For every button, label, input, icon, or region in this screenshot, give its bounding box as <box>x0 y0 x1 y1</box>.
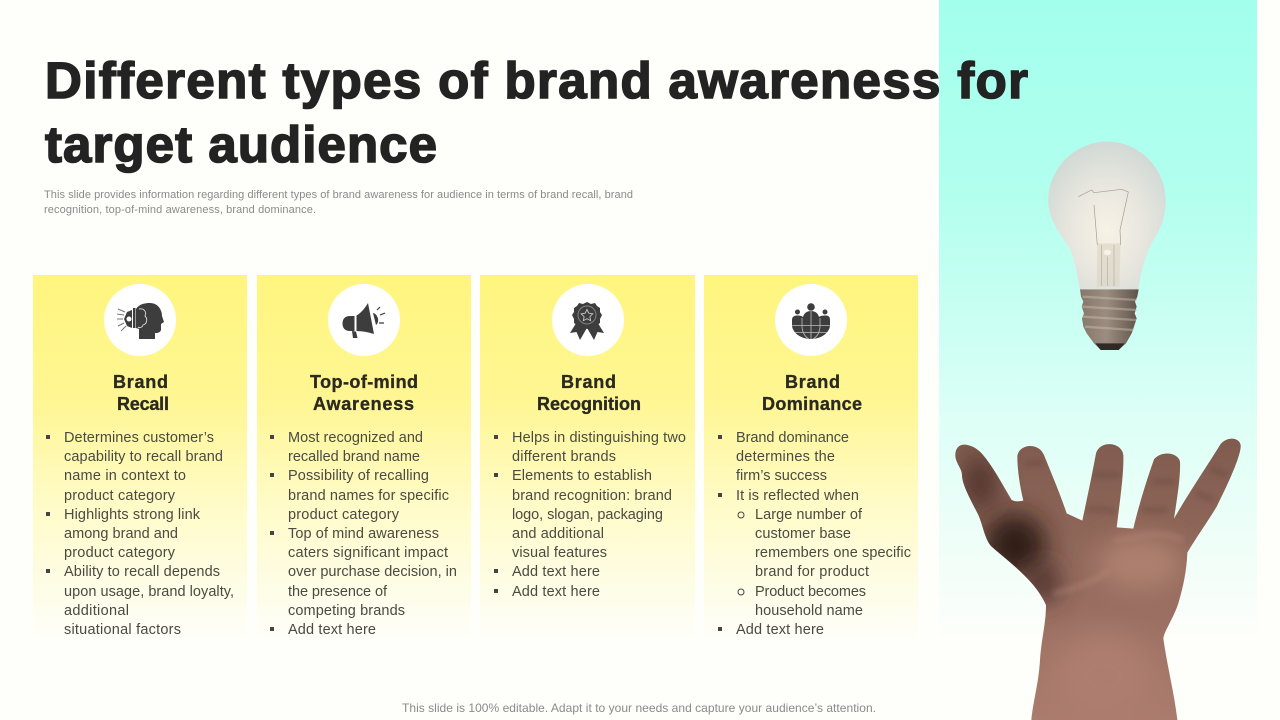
icon: award ribbon <box>552 284 624 356</box>
bullet list: brand recognition: brand recognition: brand <box>512 488 672 504</box>
heading: brand recognition <box>537 372 641 414</box>
bullet list: brand recall: additional <box>64 603 129 619</box>
bullet list: brand dominance: Brand dominance <box>736 430 849 446</box>
bullet list: brand recall: product category <box>64 545 176 561</box>
subtitle text: This slide provides information regarding different types of brand awareness for audience in terms of brand recall, brand <box>44 189 633 201</box>
heading: top-of-mind awareness: Top-of-mind <box>310 372 418 392</box>
bullet list: brand dominance: Product becomes <box>755 584 866 600</box>
heading: brand dominance: Dominance <box>762 394 862 414</box>
icon: open hand <box>955 438 1241 720</box>
heading: top-of-mind awareness: Awareness <box>313 394 414 414</box>
bullet list: brand dominance: determines the <box>736 449 835 465</box>
bullet list: top-of-mind awareness: Add text here <box>288 622 376 638</box>
icon: people on globe <box>775 284 847 356</box>
bullet list: brand recall: situational factors <box>64 622 181 638</box>
bullet list: top-of-mind awareness: brand names for specific <box>288 488 449 504</box>
heading: brand recall: Recall <box>117 394 169 414</box>
title: target audience <box>45 116 437 173</box>
heading: brand recognition: Recognition <box>537 394 641 414</box>
bullet list: top-of-mind awareness: product category <box>288 507 400 523</box>
heading: brand dominance: Brand <box>785 372 840 392</box>
bullet list: brand recognition: Elements to establish <box>512 468 652 484</box>
heading: brand dominance <box>762 372 862 414</box>
bullet list: top-of-mind awareness: competing brands <box>288 603 405 619</box>
bullet list: brand recognition: Helps in distinguishing two <box>512 430 686 446</box>
bullet list: brand recall: among brand and <box>64 526 178 542</box>
bullet list: top-of-mind awareness: Top of mind awareness <box>288 526 439 542</box>
bullet list: brand recall: upon usage, brand loyalty, <box>64 584 234 600</box>
bullet list: brand recall: Ability to recall depends <box>64 564 220 580</box>
bullet list: brand recognition: different brands <box>512 449 616 465</box>
bullet list: brand recognition <box>494 430 686 600</box>
title <box>45 52 1028 173</box>
bullet list: top-of-mind awareness: over purchase decision, in <box>288 564 457 580</box>
footer note: This slide is 100% editable. Adapt it to your needs and capture your audience’s attention. <box>402 701 876 715</box>
bullet list: brand recognition: Add text here <box>512 584 600 600</box>
icon: head with brain <box>104 284 176 356</box>
bullet list: top-of-mind awareness: Possibility of recalling <box>288 468 429 484</box>
panel: brand dominance <box>704 275 918 640</box>
bullet list: brand recognition: visual features <box>512 545 607 561</box>
icon: light bulb <box>1048 142 1166 350</box>
panel: brand recall <box>33 275 247 640</box>
bullet list: brand recognition: and additional <box>512 526 604 542</box>
bullet list: brand recall: Determines customer’s <box>64 430 214 446</box>
subtitle text <box>44 189 633 216</box>
bullet list: brand dominance: household name <box>755 603 863 619</box>
bullet list: brand dominance: Add text here <box>736 622 824 638</box>
bullet list: top-of-mind awareness: the presence of <box>288 584 388 600</box>
bullet list: brand dominance <box>718 430 911 638</box>
bullet list: brand recall: product category <box>64 488 176 504</box>
bullet list: brand dominance: remembers one specific <box>755 545 911 561</box>
bullet list: brand dominance: Large number of <box>755 507 863 523</box>
heading: brand recall <box>113 372 169 414</box>
heading: top-of-mind awareness <box>310 372 418 414</box>
bullet list: brand dominance: It is reflected when <box>736 488 859 504</box>
panel: top-of-mind awareness <box>257 275 471 640</box>
bullet list: brand recall: Highlights strong link <box>64 507 201 523</box>
bullet list: brand dominance: customer base <box>755 526 851 542</box>
heading: brand recognition: Brand <box>561 372 616 392</box>
title: Different types of brand awareness for <box>45 52 1028 109</box>
panel: right teal background <box>939 0 1257 640</box>
bullet list: brand recall: name in context to <box>64 468 186 484</box>
bullet list: top-of-mind awareness: recalled brand name <box>288 449 420 465</box>
bullet list: top-of-mind awareness <box>270 430 457 638</box>
bullet list: top-of-mind awareness: Most recognized and <box>288 430 423 446</box>
panel: brand recognition <box>480 275 695 640</box>
bullet list: brand recognition: logo, slogan, packaging <box>512 507 663 523</box>
bullet list: brand dominance: firm’s success <box>736 468 827 484</box>
heading: brand recall: Brand <box>113 372 168 392</box>
bullet list: brand recall <box>46 430 234 638</box>
bullet list: brand recognition: Add text here <box>512 564 600 580</box>
bullet list: brand dominance: brand for product <box>755 564 869 580</box>
subtitle text: recognition, top-of-mind awareness, brand dominance. <box>44 204 316 216</box>
bullet list: brand recall: capability to recall brand <box>64 449 223 465</box>
icon: megaphone <box>328 284 400 356</box>
bullet list: top-of-mind awareness: caters significant impact <box>288 545 448 561</box>
